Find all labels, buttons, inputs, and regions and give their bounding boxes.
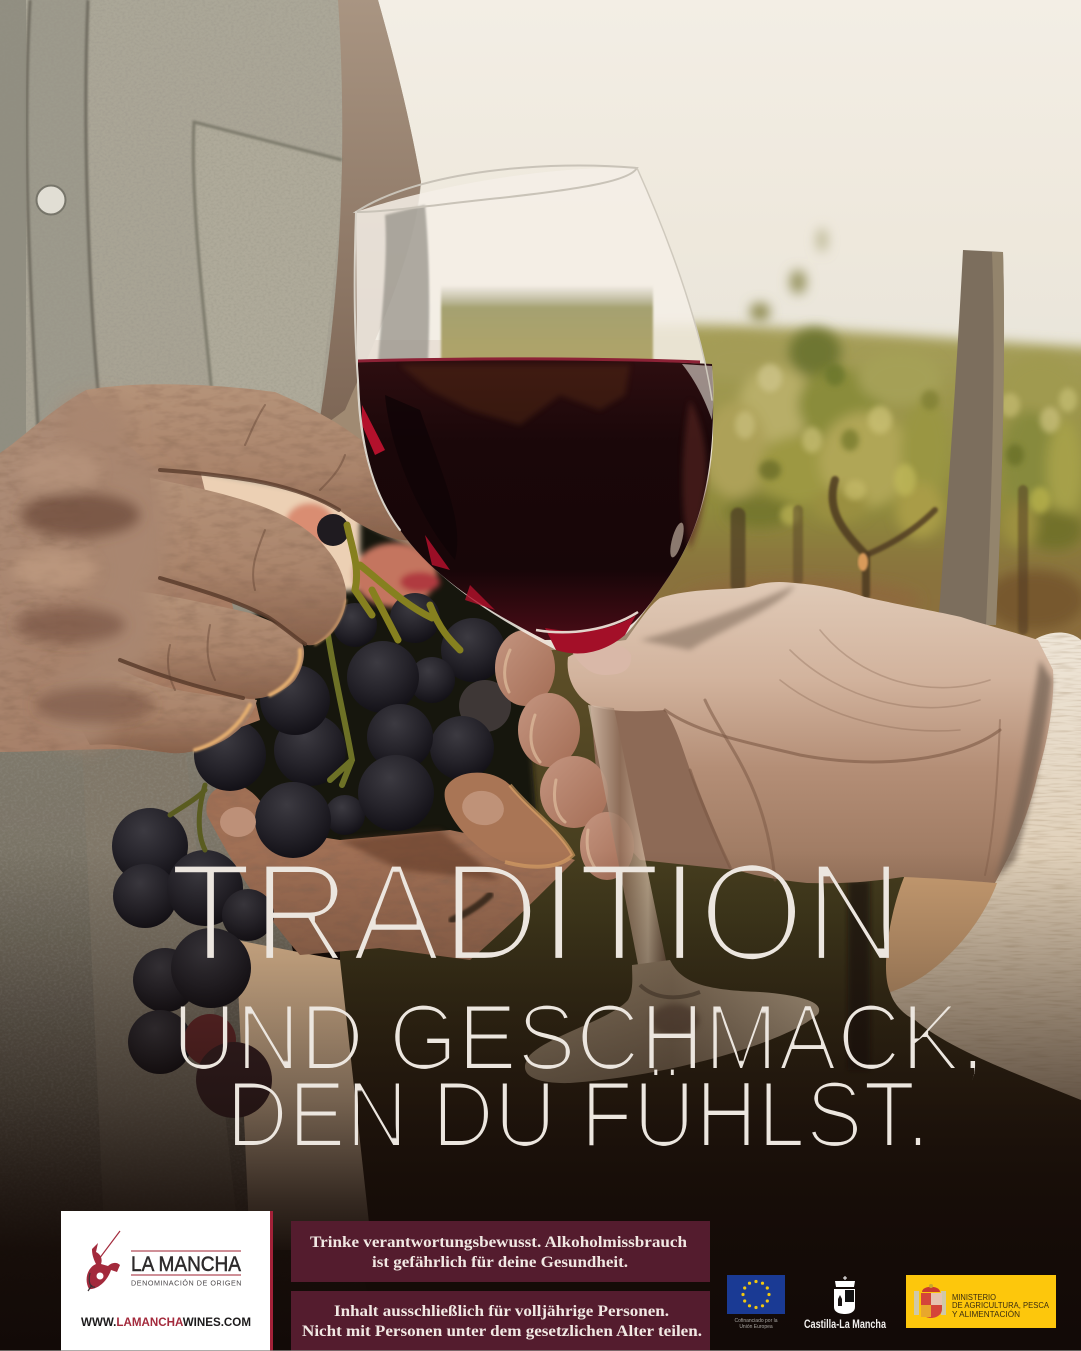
right-edge reflection	[682, 400, 706, 550]
index finger	[86, 384, 437, 540]
pocket	[193, 122, 342, 430]
icon: Castilla-La Mancha crest	[804, 1276, 886, 1331]
wine	[358, 359, 713, 640]
lower apron panel	[82, 745, 240, 1250]
lower hand holding grapes	[206, 784, 575, 960]
foot reflection	[651, 1004, 699, 1036]
subtitle line 2: DEN DU FÜHLST.	[226, 1062, 930, 1167]
red glints	[362, 405, 495, 610]
pocket outline	[193, 122, 342, 430]
thumbnail	[572, 643, 631, 675]
left shade	[0, 0, 26, 470]
shirt button	[36, 186, 66, 214]
dark area behind grapes	[240, 520, 540, 860]
light shirt-tail strip	[236, 940, 372, 1250]
base of bowl	[545, 615, 636, 654]
wooden post	[938, 250, 1004, 625]
ring on finger	[452, 895, 490, 920]
panel: adults only notice: Inhalt ausschließlich für volljährige Personen.	[334, 1303, 669, 1320]
palm lines	[665, 630, 1000, 880]
palm and thumb	[568, 582, 1053, 883]
middle finger	[150, 478, 346, 645]
panel: adults only notice: Nicht mit Personen unter dem gesetzlichen Alter teilen.	[302, 1323, 702, 1340]
farmer shirt	[0, 0, 421, 1351]
right hand holding glass	[495, 582, 1053, 883]
white edge of wine	[682, 364, 714, 420]
grape stems	[170, 525, 460, 850]
palm-hand finger holding grapes	[445, 773, 573, 867]
glimpse behind fingers	[185, 470, 440, 607]
darkening gradient at bottom	[0, 850, 1081, 1351]
shirt refraction	[378, 205, 429, 362]
ring finger	[120, 590, 304, 699]
panel: La Mancha logo card	[61, 1211, 273, 1351]
fingertips	[495, 630, 634, 880]
post highlight	[986, 252, 1004, 625]
panel: responsible drinking notice: Trinke verantwortungsbewusst. Alkoholmissbrauch	[310, 1234, 687, 1251]
icon: knight on horse	[87, 1231, 120, 1291]
icon: EU flag: Unión Europea	[739, 1324, 773, 1330]
panel: responsible drinking notice: ist gefährlich für deine Gesundheit.	[372, 1254, 628, 1271]
back of hand	[0, 390, 260, 753]
icon: EU flag: Cofinanciado por la	[734, 1318, 778, 1324]
palm shadow	[340, 830, 500, 880]
backdrop behind hands	[300, 340, 660, 660]
rough knuckle shading	[640, 585, 795, 650]
shirt placket	[27, 0, 98, 428]
vineyard refraction	[441, 285, 653, 362]
glass foot	[525, 960, 819, 1083]
grape bunch	[112, 514, 511, 1118]
cuff shadow	[995, 660, 1052, 880]
hand shading	[13, 450, 155, 723]
pinky finger	[60, 663, 257, 753]
wine surface line	[358, 359, 700, 362]
website url: WWW.LAMANCHAWINES.COM	[81, 1317, 251, 1329]
subtitle line 1: UND GESCHMACK,	[172, 985, 985, 1090]
nail	[459, 788, 507, 828]
highlight in wine	[668, 521, 686, 559]
icon: Spanish coat of arms	[914, 1284, 946, 1318]
panel: ministry logo: DE AGRICULTURA, PESCA	[952, 1301, 1050, 1310]
right-hand fingers in front of grapes	[220, 773, 573, 867]
knuckle creases and gaps	[120, 405, 345, 698]
wine glass stem and foot	[525, 705, 819, 1083]
sky	[340, 0, 1081, 400]
logo subtitle: DENOMINACIÓN DE ORIGEN	[131, 1278, 242, 1288]
warm light edges on knuckles	[195, 600, 346, 750]
index fingernail	[391, 487, 437, 533]
icon: Castilla-La Mancha crest: Castilla-La Mancha	[804, 1319, 886, 1331]
glass rim	[355, 165, 712, 530]
panel: ministry logo: Y ALIMENTACIÓN	[952, 1310, 1020, 1319]
left hand with fingers	[0, 384, 437, 753]
warm reflection in wine	[400, 365, 630, 425]
finger pad creases	[505, 650, 595, 868]
logo rules	[131, 1250, 241, 1252]
title: tradition: TRADITION	[169, 833, 903, 990]
sweater sleeve	[886, 632, 1081, 1100]
finger nail	[220, 807, 256, 837]
finger shafts	[590, 700, 735, 870]
panel: adults only notice	[291, 1291, 710, 1351]
sleeve lining	[886, 875, 997, 992]
shirt shading	[27, 0, 98, 428]
glass body	[356, 168, 713, 650]
wine glass bowl	[355, 165, 714, 654]
panel: ministry logo: MINISTERIO	[952, 1293, 996, 1302]
reflected post in wine	[385, 395, 457, 560]
panel: responsible drinking notice	[291, 1221, 710, 1282]
logo wordmark: LA MANCHA	[131, 1253, 241, 1276]
vineyard background	[340, 228, 1081, 1351]
blend of finger bases into hand	[46, 397, 168, 745]
sleeve strip	[318, 0, 421, 430]
icon: EU flag	[727, 1275, 785, 1330]
stem	[588, 705, 668, 975]
panel: ministry logo	[906, 1275, 1056, 1328]
